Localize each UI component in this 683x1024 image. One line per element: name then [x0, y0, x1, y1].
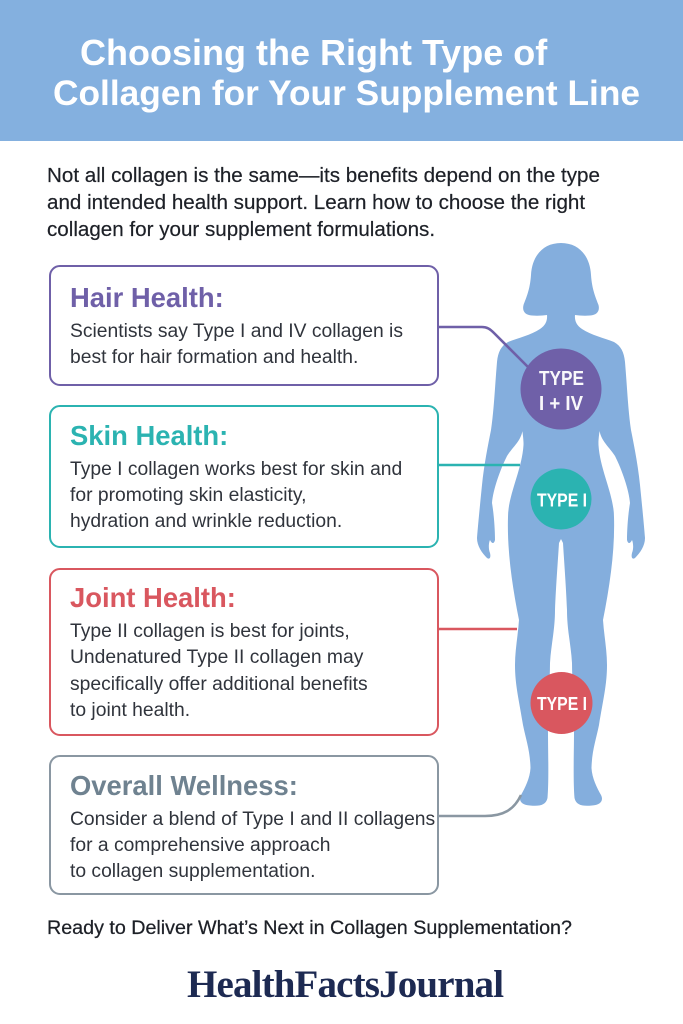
panel: skin health	[49, 405, 439, 548]
panel: joint health	[49, 568, 439, 736]
title	[53, 32, 640, 113]
heading: overall wellness: Overall Wellness:	[70, 770, 298, 801]
text: skin health	[70, 458, 402, 532]
connector: joint	[438, 628, 517, 630]
text: skin health: Type I collagen works best for skin and	[70, 458, 402, 480]
text: hair health: best for hair formation and health.	[70, 347, 358, 368]
text: overall wellness: for a comprehensive approach	[70, 835, 330, 856]
text: overall wellness	[70, 808, 435, 882]
connector: skin	[438, 464, 520, 466]
heading: hair health: Hair Health:	[70, 282, 224, 313]
marker: type I joint	[530, 672, 592, 734]
text: hair health	[70, 320, 403, 368]
marker: type I joint: TYPE I	[537, 694, 587, 714]
marker: type I + IV	[520, 348, 602, 430]
title: Choosing the Right Type of	[80, 32, 547, 73]
intro text: and intended health support. Learn how to choose the right	[47, 191, 585, 214]
text: joint health: Type II collagen is best for joints,	[70, 621, 350, 642]
text: overall wellness: to collagen supplementation.	[70, 861, 315, 882]
text: hair health: Scientists say Type I and IV collagen is	[70, 320, 403, 342]
marker: type I skin	[530, 468, 592, 530]
intro text: collagen for your supplement formulations.	[47, 218, 435, 241]
silhouette	[477, 243, 645, 806]
heading: joint health: Joint Health:	[70, 582, 236, 613]
panel: hair health	[49, 265, 439, 386]
marker: type I skin: TYPE I	[537, 490, 587, 510]
connector: hair	[438, 327, 531, 370]
logo wordmark: HealthFactsJournal	[187, 963, 503, 1006]
connector: overall wellness	[438, 795, 521, 816]
header banner	[0, 0, 683, 141]
intro text	[47, 164, 600, 241]
text: joint health	[70, 621, 368, 721]
text: skin health: hydration and wrinkle reduction.	[70, 511, 342, 532]
intro text: Not all collagen is the same—its benefits depend on the type	[47, 164, 600, 187]
text: joint health: Undenatured Type II collagen may	[70, 647, 363, 668]
text: joint health: to joint health.	[70, 700, 190, 721]
text: joint health: specifically offer additional benefits	[70, 674, 368, 695]
title: Collagen for Your Supplement Line	[53, 74, 640, 113]
heading: skin health: Skin Health:	[70, 420, 228, 451]
marker: type I + IV: I + IV	[539, 393, 584, 415]
call to action: Ready to Deliver What’s Next in Collagen Supplementation?	[47, 917, 572, 939]
panel: overall wellness	[49, 755, 439, 895]
text: skin health: for promoting skin elasticity,	[70, 485, 306, 506]
text: overall wellness: Consider a blend of Type I and II collagens	[70, 808, 435, 830]
marker: type I + IV: TYPE	[539, 368, 584, 390]
